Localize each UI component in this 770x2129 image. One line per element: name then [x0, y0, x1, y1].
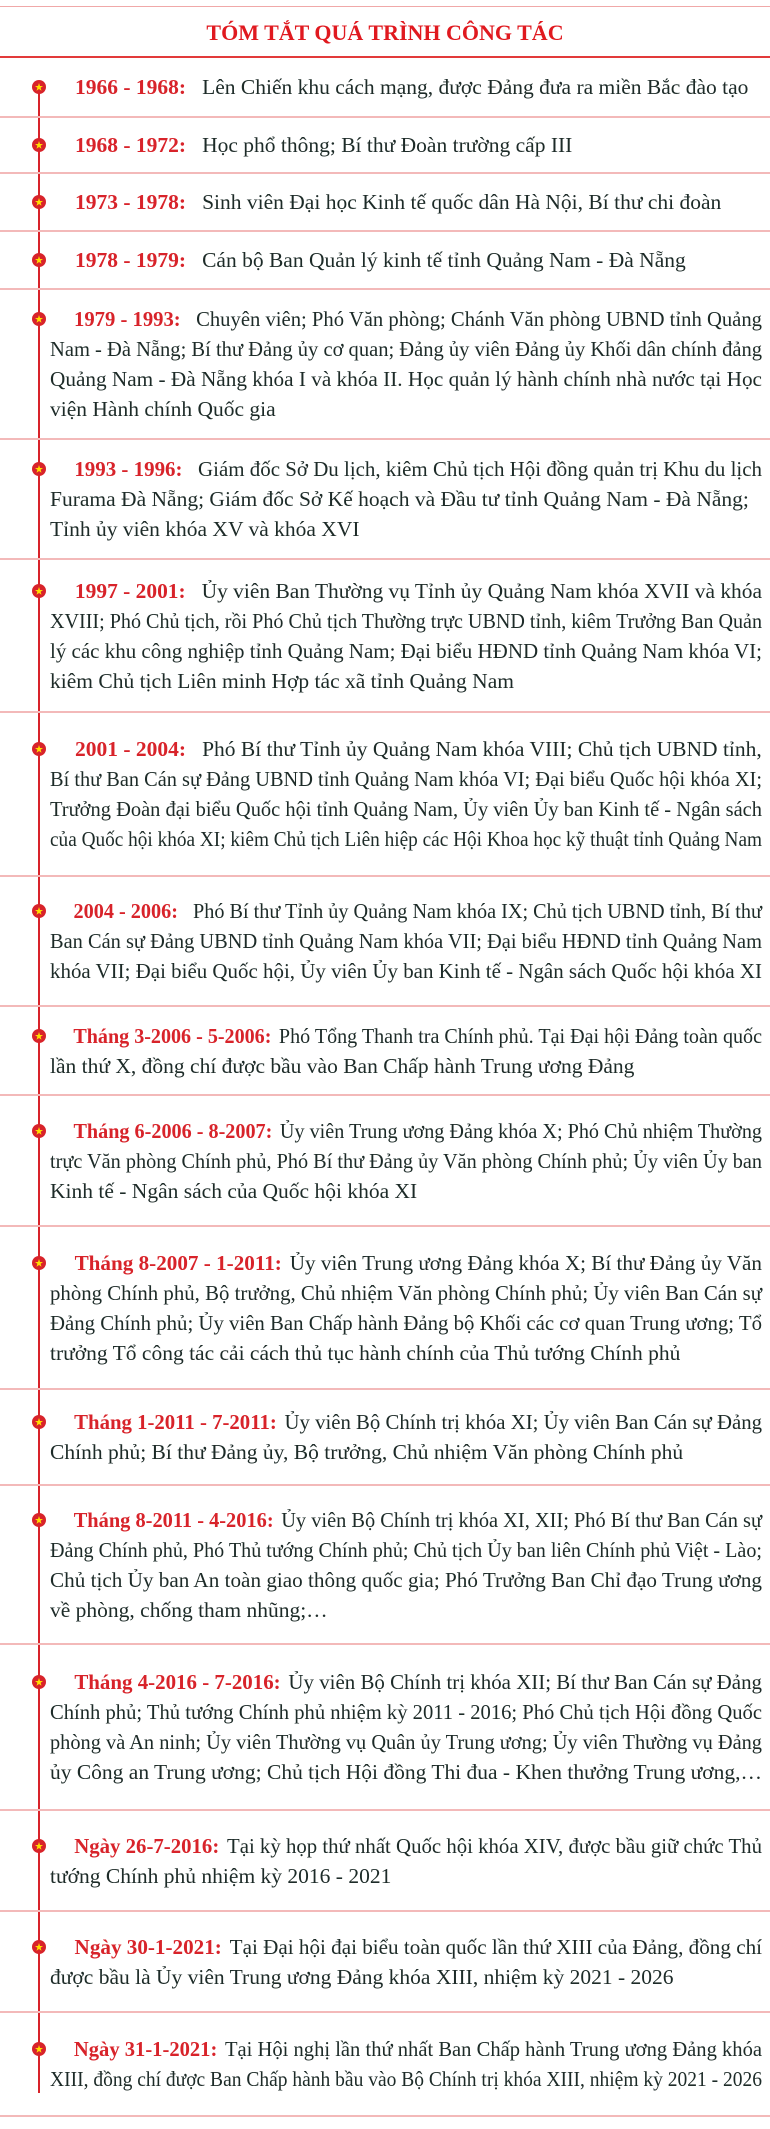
- row: 6-2006 - 8-2007: Tháng 6-2006 - 8-2007: Ủy viên Trung ương Đảng khóa X; Phó Chủ nhiệm Thường: [73, 1118, 762, 1142]
- row: 1997-2001: XVIII; Phó Chủ tịch, rồi Phó Chủ tịch Thường trực UBND tỉnh, kiêm Trưởng Ban Quản: [50, 608, 762, 632]
- row: 2001-2004: [32, 737, 762, 851]
- row: 6-2006 - 8-2007: Kinh tế - Ngân sách của Quốc hội khóa XI: [50, 1178, 417, 1202]
- row: 6-2006 - 8-2007: [32, 1118, 762, 1202]
- row: 8-2007 - 1-2011: [32, 1250, 763, 1364]
- row: 8-2007 - 1-2011: phòng Chính phủ, Bộ trưởng, Chủ nhiệm Văn phòng Chính phủ; Ủy viên Ban Cán sự: [50, 1280, 762, 1304]
- row: 3-2006 - 5-2006: [32, 1024, 762, 1078]
- row: 3-2006 - 5-2006: Tháng 3-2006 - 5-2006: Phó Tổng Thanh tra Chính phủ. Tại Đại hội Đảng toàn quốc: [73, 1024, 762, 1048]
- row: 1966-1968: 1966 - 1968: Lên Chiến khu cách mạng, được Đảng đưa ra miền Bắc đào tạo: [75, 75, 748, 99]
- row: 1-2011 - 7-2011: Tháng 1-2011 - 7-2011: Ủy viên Bộ Chính trị khóa XI; Ủy viên Ban Cán sự Đảng: [74, 1410, 762, 1434]
- row: 8-2007 - 1-2011: trưởng Tổ công tác cải cách thủ tục hành chính của Thủ tướng Chính phủ: [50, 1340, 680, 1364]
- row: 4-2016 - 7-2016: phòng và An ninh; Ủy viên Thường vụ Quân ủy Trung ương; Ủy viên Thường vụ Đảng: [50, 1730, 762, 1754]
- row: 2004-2006: khóa VII; Đại biểu Quốc hội, Ủy viên Ủy ban Kinh tế - Ngân sách Quốc hội khóa XI: [50, 959, 762, 983]
- row: 1997-2001: kiêm Chủ tịch Liên minh Hợp tác xã tỉnh Quảng Nam: [50, 668, 514, 692]
- row: 2001-2004: của Quốc hội khóa XI; kiêm Chủ tịch Liên hiệp các Hội Khoa học kỹ thuật tỉnh Quảng Nam: [50, 827, 762, 851]
- row: 1973-1978: 1973 - 1978: Sinh viên Đại học Kinh tế quốc dân Hà Nội, Bí thư chi đoàn: [75, 190, 721, 214]
- row: 4-2016 - 7-2016: Tháng 4-2016 - 7-2016: Ủy viên Bộ Chính trị khóa XII; Bí thư Ban Cán sự Đảng: [74, 1670, 762, 1694]
- row: 1993-1996: Tỉnh ủy viên khóa XV và khóa XVI: [50, 517, 360, 541]
- title: TÓM TẮT QUÁ TRÌNH CÔNG TÁC: [206, 20, 564, 45]
- timeline vertical line: [38, 88, 40, 2093]
- row: 2004-2006: [32, 899, 762, 983]
- row: 30-1-2021: [32, 1934, 762, 1988]
- row: 26-7-2016: Ngày 26-7-2016: Tại kỳ họp thứ nhất Quốc hội khóa XIV, được bầu giữ chức Thủ: [74, 1834, 762, 1858]
- row: 8-2007 - 1-2011: Tháng 8-2007 - 1-2011: Ủy viên Trung ương Đảng khóa X; Bí thư Đảng ủy Văn: [75, 1250, 762, 1274]
- row: 2001-2004: 2001 - 2004: Phó Bí thư Tỉnh ủy Quảng Nam khóa VIII; Chủ tịch UBND tỉnh,: [75, 737, 762, 761]
- row: 2004-2006: Ban Cán sự Đảng UBND tỉnh Quảng Nam khóa VII; Đại biểu HĐND tỉnh Quảng Nam: [50, 929, 762, 953]
- row: 2004-2006: 2004 - 2006: Phó Bí thư Tỉnh ủy Quảng Nam khóa IX; Chủ tịch UBND tỉnh, Bí thư: [74, 899, 762, 923]
- row: 1993-1996: [32, 457, 762, 541]
- row: 3-2006 - 5-2006: lần thứ X, đồng chí được bầu vào Ban Chấp hành Trung ương Đảng: [50, 1054, 634, 1078]
- row: 1997-2001: lý các khu công nghiệp tỉnh Quảng Nam; Đại biểu HĐND tỉnh Quảng Nam khóa VI;: [50, 638, 762, 662]
- row: 4-2016 - 7-2016: [32, 1670, 762, 1784]
- row: 31-1-2021: Ngày 31-1-2021: Tại Hội nghị lần thứ nhất Ban Chấp hành Trung ương Đảng khóa: [74, 2037, 762, 2061]
- row: 8-2011 - 4-2016: Đảng Chính phủ, Phó Thủ tướng Chính phủ; Chủ tịch Ủy ban liên Chính phủ Việt - Lào;: [50, 1538, 762, 1562]
- row: 1968-1972: 1968 - 1972: Học phổ thông; Bí thư Đoàn trường cấp III: [75, 133, 572, 157]
- row: 4-2016 - 7-2016: Chính phủ; Thủ tướng Chính phủ nhiệm kỳ 2011 - 2016; Phó Chủ tịch Hội đồng Quốc: [50, 1700, 762, 1724]
- row: 8-2007 - 1-2011: Đảng Chính phủ; Ủy viên Ban Chấp hành Đảng bộ Khối các cơ quan Trung ương; Tổ: [50, 1310, 762, 1334]
- row: 31-1-2021: XIII, đồng chí được Ban Chấp hành bầu vào Bộ Chính trị khóa XIII, nhiệm kỳ 2021 - 2026: [50, 2067, 762, 2091]
- row: 1993-1996: Furama Đà Nẵng; Giám đốc Sở Kế hoạch và Đầu tư tỉnh Quảng Nam - Đà Nẵng;: [50, 487, 749, 511]
- row: 2001-2004: Bí thư Ban Cán sự Đảng UBND tỉnh Quảng Nam khóa VI; Đại biểu Quốc hội khóa XI;: [50, 767, 762, 791]
- row: 6-2006 - 8-2007: trực Văn phòng Chính phủ, Phó Bí thư Đảng ủy Văn phòng Chính phủ; Ủy viên Ủy ban: [50, 1148, 762, 1172]
- row: 8-2011 - 4-2016: [32, 1508, 763, 1622]
- row: 8-2011 - 4-2016: Tháng 8-2011 - 4-2016: Ủy viên Bộ Chính trị khóa XI, XII; Phó Bí thư Ban Cán sự: [74, 1508, 762, 1532]
- row: 1979-1993: viện Hành chính Quốc gia: [50, 397, 276, 421]
- row: 1978-1979: 1978 - 1979: Cán bộ Ban Quản lý kinh tế tỉnh Quảng Nam - Đà Nẵng: [75, 248, 686, 272]
- row: 4-2016 - 7-2016: ủy Công an Trung ương; Chủ tịch Hội đồng Thi đua - Khen thưởng Trung ương,…: [50, 1760, 762, 1784]
- row: 1997-2001: [32, 578, 762, 692]
- row: 31-1-2021: [32, 2037, 762, 2091]
- row: 26-7-2016: tướng Chính phủ nhiệm kỳ 2016 - 2021: [50, 1864, 391, 1888]
- row: 30-1-2021: được bầu là Ủy viên Trung ương Đảng khóa XIII, nhiệm kỳ 2021 - 2026: [50, 1964, 673, 1988]
- row: 2001-2004: Trưởng Đoàn đại biểu Quốc hội tỉnh Quảng Nam, Ủy viên Ủy ban Kinh tế - Ngân sách: [50, 797, 762, 821]
- row: 8-2011 - 4-2016: về phòng, chống tham nhũng;…: [50, 1598, 328, 1622]
- row: 1-2011 - 7-2011: Chính phủ; Bí thư Đảng ủy, Bộ trưởng, Chủ nhiệm Văn phòng Chính phủ: [50, 1440, 683, 1464]
- row: 1979-1993: 1979 - 1993: Chuyên viên; Phó Văn phòng; Chánh Văn phòng UBND tỉnh Quảng: [74, 307, 762, 331]
- row: 1979-1993: Quảng Nam - Đà Nẵng khóa I và khóa II. Học quản lý hành chính nhà nước tại Học: [50, 367, 762, 391]
- row: 1997-2001: 1997 - 2001: Ủy viên Ban Thường vụ Tỉnh ủy Quảng Nam khóa XVII và khóa: [75, 578, 762, 602]
- row: 1-2011 - 7-2011: [32, 1410, 762, 1464]
- row: 30-1-2021: Ngày 30-1-2021: Tại Đại hội đại biểu toàn quốc lần thứ XIII của Đảng, đồng chí: [75, 1934, 762, 1958]
- row: 1979-1993: [32, 307, 762, 421]
- row: 1993-1996: 1993 - 1996: Giám đốc Sở Du lịch, kiêm Chủ tịch Hội đồng quản trị Khu du lịch: [74, 457, 762, 481]
- row: 1979-1993: Nam - Đà Nẵng; Bí thư Đảng ủy cơ quan; Đảng ủy viên Đảng ủy Khối dân chính đảng: [50, 337, 762, 361]
- row: 8-2011 - 4-2016: Chủ tịch Ủy ban An toàn giao thông quốc gia; Phó Trưởng Ban Chỉ đạo Trung ương: [50, 1568, 762, 1592]
- row: 26-7-2016: [32, 1834, 762, 1888]
